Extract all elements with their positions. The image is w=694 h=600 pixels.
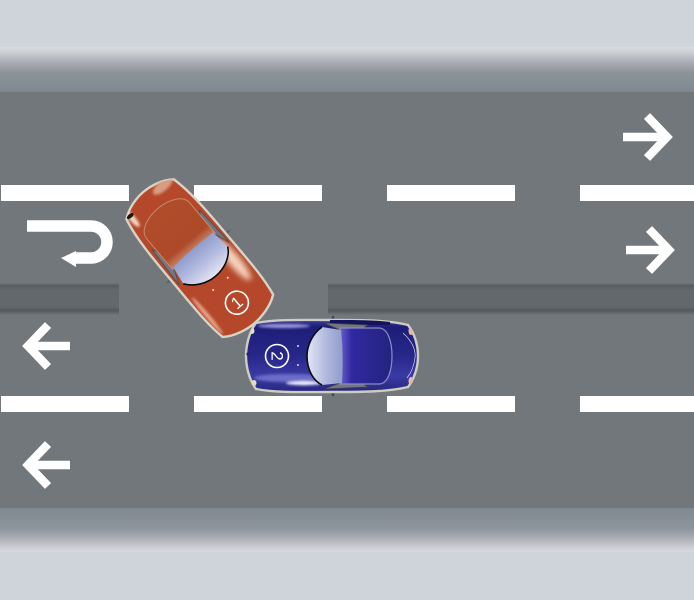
number badge bbox=[266, 344, 288, 368]
mirrors bbox=[331, 316, 335, 396]
bumper dot bbox=[246, 352, 250, 356]
number badge bbox=[221, 286, 253, 319]
windshield edge bbox=[307, 327, 322, 385]
car 2: blue bbox=[246, 316, 418, 396]
pavement top bbox=[0, 0, 694, 48]
hood dots bbox=[212, 276, 229, 291]
median left bbox=[0, 283, 119, 315]
windshield bbox=[307, 327, 343, 385]
highlights bbox=[250, 320, 414, 386]
side windows bbox=[324, 323, 368, 389]
lower lane markings bbox=[1, 396, 694, 412]
mirrors bbox=[166, 229, 231, 285]
road surface bbox=[0, 92, 694, 508]
upper lane markings bbox=[1, 185, 694, 201]
arrow: left lower bbox=[28, 444, 70, 486]
car 1: red bbox=[125, 178, 274, 338]
windshield edge bbox=[183, 247, 237, 295]
windshield bbox=[170, 231, 237, 295]
arrow: right upper bbox=[623, 116, 667, 158]
body bbox=[116, 168, 282, 347]
median right bbox=[328, 283, 694, 315]
highlights bbox=[126, 180, 254, 335]
pavement bottom bbox=[0, 552, 694, 600]
number badge: 2 bbox=[268, 351, 286, 361]
roof bbox=[136, 190, 215, 269]
rear deck arc bbox=[403, 333, 415, 378]
kerb bottom bbox=[0, 508, 694, 553]
arrow: left upper bbox=[28, 325, 70, 367]
arrow: u-turn bbox=[27, 226, 107, 267]
side windows bbox=[151, 209, 229, 285]
arrow: right lower bbox=[626, 229, 669, 271]
hood dots bbox=[297, 345, 299, 366]
kerb top bbox=[0, 47, 694, 92]
roof bbox=[340, 328, 392, 384]
body bbox=[246, 320, 418, 392]
number badge: 1 bbox=[227, 292, 247, 313]
